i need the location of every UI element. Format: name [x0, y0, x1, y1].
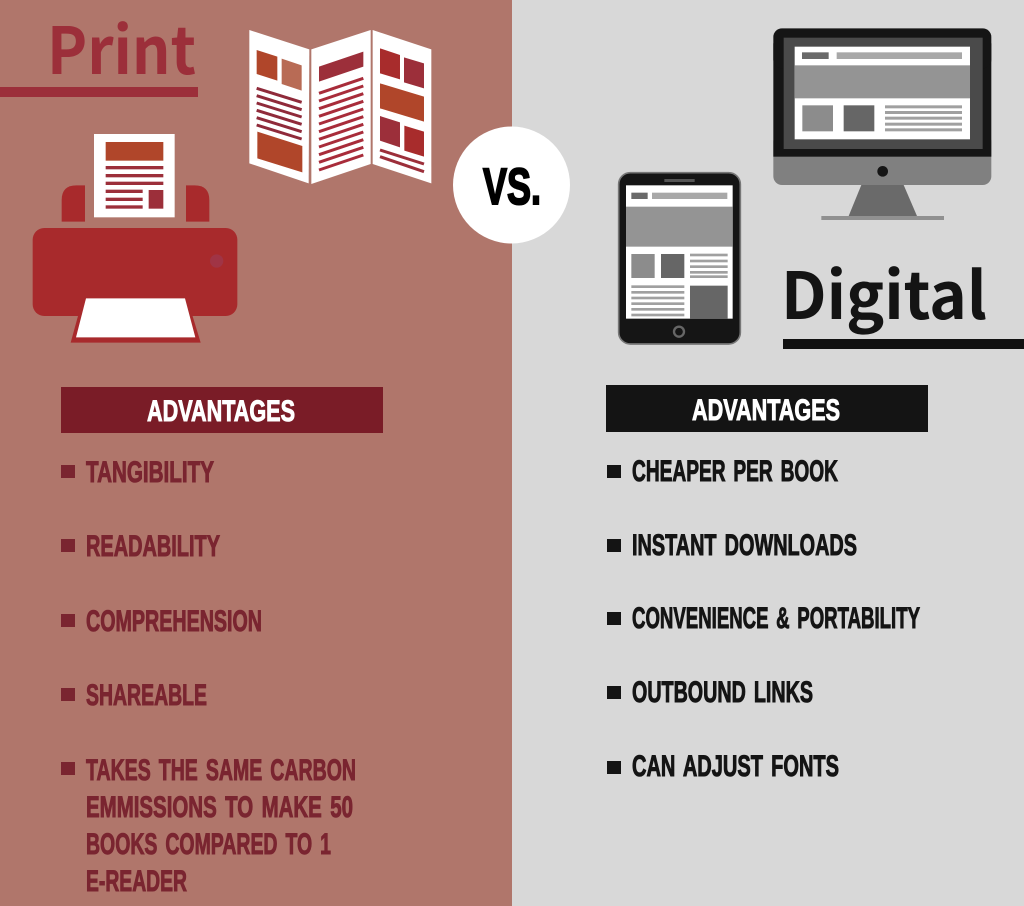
list: print advantages: SHAREABLE: [86, 679, 207, 712]
heading: Digital: Digital: [781, 244, 987, 338]
icon: desktop monitor: [773, 28, 991, 220]
list: print advantages: BOOKS COMPARED TO 1: [86, 828, 331, 861]
list: digital advantages: OUTBOUND LINKS: [632, 676, 813, 709]
list: print advantages: E-READER: [86, 865, 187, 898]
header: advantages print: ADVANTAGES: [147, 395, 295, 428]
header: advantages digital: ADVANTAGES: [692, 394, 840, 427]
icon: printer: [33, 134, 237, 343]
heading: Print: Print: [47, 0, 196, 93]
list: print advantages: [61, 456, 356, 898]
list: digital advantages: CAN ADJUST FONTS: [632, 750, 839, 783]
icon: tablet: [619, 173, 740, 344]
header: advantages digital: [606, 385, 928, 432]
list: print advantages: READABILITY: [86, 530, 220, 563]
badge: VS.: VS.: [483, 158, 541, 215]
icon: brochure: [249, 30, 431, 184]
list: print advantages: TANGIBILITY: [86, 456, 214, 489]
list: print advantages: COMPREHENSION: [86, 605, 262, 638]
list: digital advantages: INSTANT DOWNLOADS: [632, 529, 857, 562]
heading: Print: [0, 0, 198, 97]
list: digital advantages: CHEAPER PER BOOK: [632, 455, 838, 488]
list: print advantages: TAKES THE SAME CARBON: [86, 754, 356, 787]
panel: print: [0, 0, 512, 906]
badge: VS.: [453, 126, 570, 244]
header: advantages print: [61, 387, 383, 433]
list: digital advantages: [607, 455, 920, 783]
panel: digital: [512, 0, 1024, 906]
list: print advantages: EMMISSIONS TO MAKE 50: [86, 791, 353, 824]
